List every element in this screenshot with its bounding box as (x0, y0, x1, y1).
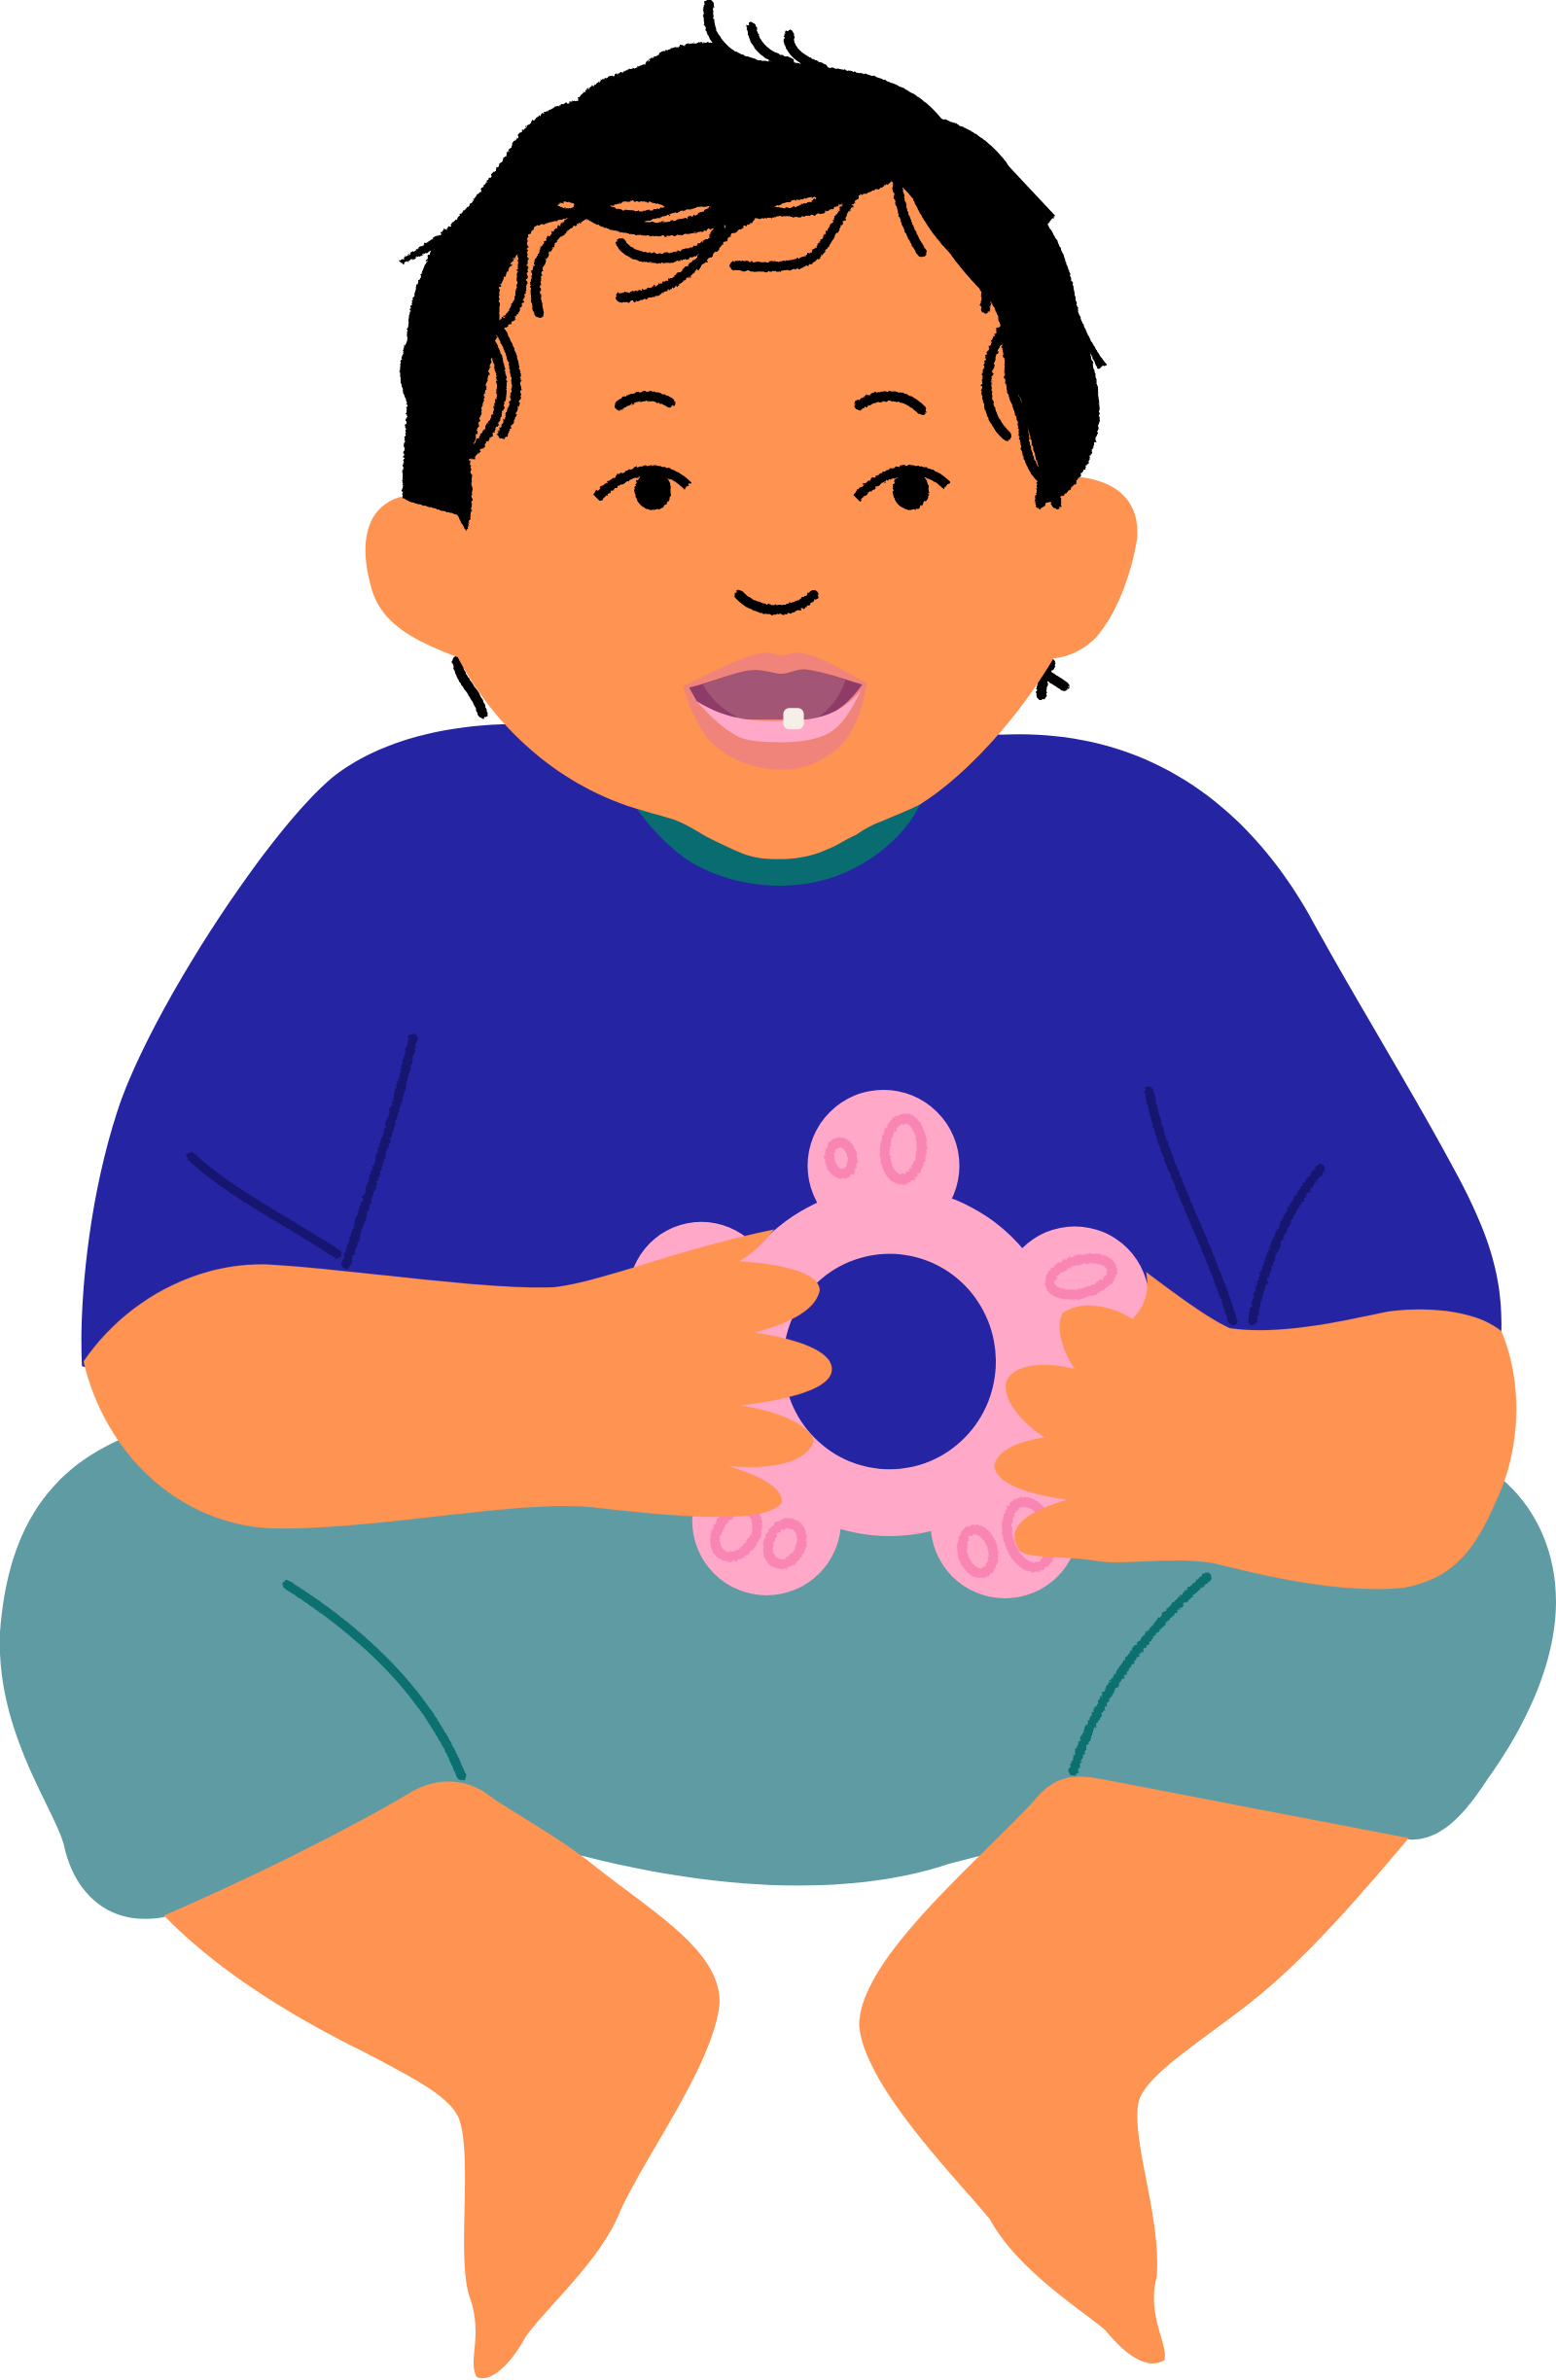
left eye (596, 471, 688, 510)
mouth interior (690, 669, 863, 718)
hair strands (469, 5, 1056, 504)
mouth (683, 652, 866, 770)
hair mass (400, 43, 1107, 531)
neck hair wisps (457, 660, 1064, 714)
teether body (628, 1090, 1149, 1598)
left arm and hand (84, 1230, 831, 1528)
right ear (1040, 476, 1137, 659)
head (449, 129, 1072, 859)
left ear (366, 495, 486, 662)
collar (636, 804, 920, 886)
teether hole (783, 1254, 996, 1469)
hair (400, 5, 1107, 531)
shirt creases (192, 1038, 1321, 1320)
nose (739, 595, 814, 610)
tooth (783, 708, 804, 729)
eyebrows (619, 396, 922, 410)
shirt (82, 724, 1502, 1495)
pants creases (287, 1577, 1207, 1776)
right eye (856, 471, 947, 510)
fringe gaps (557, 197, 817, 223)
lips (683, 652, 866, 770)
gums (696, 690, 861, 742)
teether bumps (707, 1117, 1116, 1576)
pants (0, 1439, 1556, 1919)
teether (628, 1090, 1149, 1598)
right arm and hand (994, 1272, 1516, 1589)
mouth shade (703, 669, 845, 719)
left leg (164, 1781, 720, 2378)
right leg (859, 1776, 1409, 2363)
